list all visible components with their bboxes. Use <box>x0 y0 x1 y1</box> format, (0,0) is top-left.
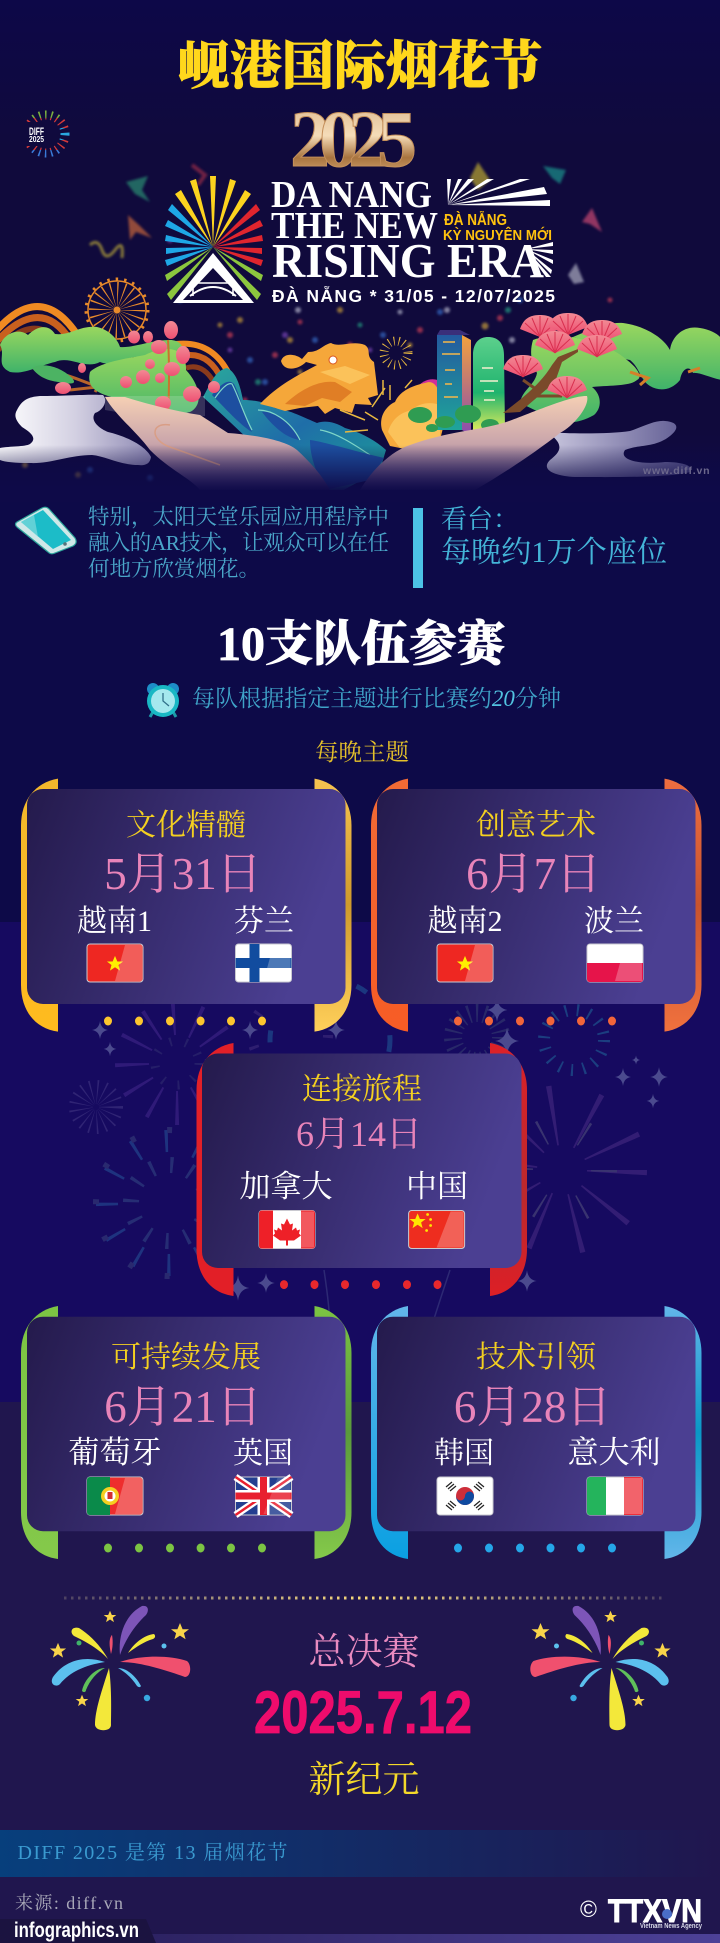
dots <box>280 1280 442 1289</box>
illustration: Da Nang scene <box>0 279 720 502</box>
text block: seating: 看台： <box>441 505 519 534</box>
text block: AR technology <box>88 505 389 581</box>
panel: 6月7日: 波兰 <box>584 905 644 938</box>
text block: seating: 每晚约1万个座位 <box>441 536 667 569</box>
firework spark rays near towers <box>340 341 412 432</box>
panel: 5月31日 <box>21 779 352 1032</box>
DIFF 2025 logo: DIFF <box>29 126 44 138</box>
flag: Vietnam <box>437 944 493 982</box>
right tree <box>503 323 720 423</box>
dots <box>454 1544 616 1552</box>
gold 2025: 2025 <box>290 96 417 184</box>
panel: 6月7日 <box>371 779 702 1032</box>
orange clouds <box>415 379 445 420</box>
panel: 5月31日: 5月31日 <box>104 849 262 899</box>
footer strip <box>0 1919 720 1943</box>
fireworks background <box>81 980 668 1330</box>
label: nightly themes: 每晚主题 <box>315 739 409 766</box>
ferris wheel <box>86 279 148 341</box>
panel: 6月28日 <box>371 1306 702 1559</box>
panel: 6月21日: 可持续发展 <box>111 1341 261 1374</box>
left tree <box>0 327 205 430</box>
panel: 6月28日: 6月28日 <box>454 1382 611 1432</box>
flag: Portugal <box>87 1477 143 1515</box>
panel: 6月14日: 中国 <box>406 1169 468 1204</box>
pink fan leaves <box>503 313 622 398</box>
text block: AR technology: 何地方欣赏烟花。 <box>88 557 260 581</box>
towers <box>437 330 505 435</box>
dotted divider <box>64 1596 666 1600</box>
flag: China <box>409 1210 465 1248</box>
watermark: www.diff.vn <box>642 465 710 477</box>
info band <box>0 1830 720 1877</box>
small trees on right hand <box>408 405 499 432</box>
panel: 5月31日: 文化精髓 <box>126 809 246 842</box>
agency logo: TTXVN <box>608 1893 702 1929</box>
panel: 6月7日: 创意艺术 <box>476 809 596 842</box>
heading: 10 teams: 10支队伍参赛 <box>217 617 510 671</box>
panel: 6月21日: 6月21日 <box>104 1382 262 1432</box>
flag: Poland <box>587 944 643 982</box>
final heading: 总决赛 <box>308 1631 420 1673</box>
panel: 6月28日: 意大利 <box>568 1435 660 1470</box>
text block: AR technology: 特别，太阳天堂乐园应用程序中 <box>88 505 389 530</box>
agency logo <box>580 1893 703 1930</box>
agency logo: © <box>580 1896 597 1922</box>
DIFF 2025 logo <box>20 115 65 153</box>
flag: United Kingdom <box>236 1477 292 1515</box>
mountains <box>203 368 386 492</box>
DIFF 2025 logo: 2025 <box>29 135 44 144</box>
icon: firework right <box>530 1606 671 1730</box>
agency logo: Vietnam News Agency <box>640 1921 703 1930</box>
final date: 2025.7.12 <box>254 1679 472 1746</box>
panel: 5月31日: 芬兰 <box>234 905 294 938</box>
flag: Finland <box>236 944 292 982</box>
dots <box>454 1016 616 1026</box>
festival logo: wordmark: RISING ERA <box>272 233 545 288</box>
right clouds <box>547 421 691 477</box>
festival logo: wordmark: KỲ NGUYÊN MỚI <box>443 226 552 244</box>
festival logo: wordmark: DA NANG <box>271 174 432 216</box>
panel: 6月14日: 加拿大 <box>240 1169 332 1204</box>
panel: 6月14日 <box>196 1043 527 1296</box>
dragon <box>260 343 378 414</box>
text block: AR technology: 融入的AR技术，让观众可以在任 <box>88 531 389 556</box>
festival logo: wordmark: THE NEW <box>271 205 438 247</box>
footer strip: infographics.vn <box>14 1919 139 1942</box>
rainbow arcs <box>0 307 229 386</box>
text: match duration: 每队根据指定主题进行比赛约20分钟 <box>192 686 561 711</box>
icon: phone <box>16 507 76 554</box>
confetti background <box>22 162 612 481</box>
title: 岘港国际烟花节 <box>178 38 542 96</box>
panel: 6月28日: 技术引领 <box>476 1341 597 1374</box>
panel: 6月21日: 英国 <box>233 1437 293 1470</box>
panel: 6月14日: 连接旅程 <box>302 1073 422 1106</box>
festival logo: wordmark <box>271 174 555 306</box>
bottom fade <box>0 445 720 492</box>
flag: Italy <box>587 1477 643 1515</box>
final theme: 新纪元 <box>308 1760 420 1801</box>
panel: 6月21日: 葡萄牙 <box>68 1435 162 1470</box>
festival logo: wordmark: ĐÀ NẴNG <box>444 210 507 229</box>
panel: 5月31日: 越南1 <box>77 905 152 938</box>
festival logo: firework fan <box>165 176 263 303</box>
panel: 6月14日: 6月14日 <box>296 1114 422 1154</box>
pink flowers <box>55 321 220 410</box>
flag: South Korea <box>437 1477 493 1515</box>
info band: DIFF 2025 是第 13 届烟花节 <box>18 1841 288 1864</box>
icon: firework left <box>50 1606 190 1730</box>
text block: seating <box>441 505 667 569</box>
festival logo: wordmark: ĐÀ NẴNG * 31/05 - 12/07/2025 <box>272 285 555 306</box>
dots <box>104 1016 266 1026</box>
panel: 6月7日: 越南2 <box>428 905 502 938</box>
panel: 6月21日 <box>21 1306 352 1559</box>
divider bar <box>413 508 423 588</box>
panel: 6月7日: 6月7日 <box>466 849 601 899</box>
hands <box>105 397 330 490</box>
flag: Canada <box>259 1210 315 1248</box>
panel: 6月28日: 韩国 <box>434 1437 494 1470</box>
icon: alarm clock <box>147 683 179 717</box>
dots <box>104 1544 266 1552</box>
left clouds <box>0 395 151 465</box>
source: 来源: diff.vn <box>15 1893 123 1913</box>
flag: Vietnam <box>87 944 143 982</box>
